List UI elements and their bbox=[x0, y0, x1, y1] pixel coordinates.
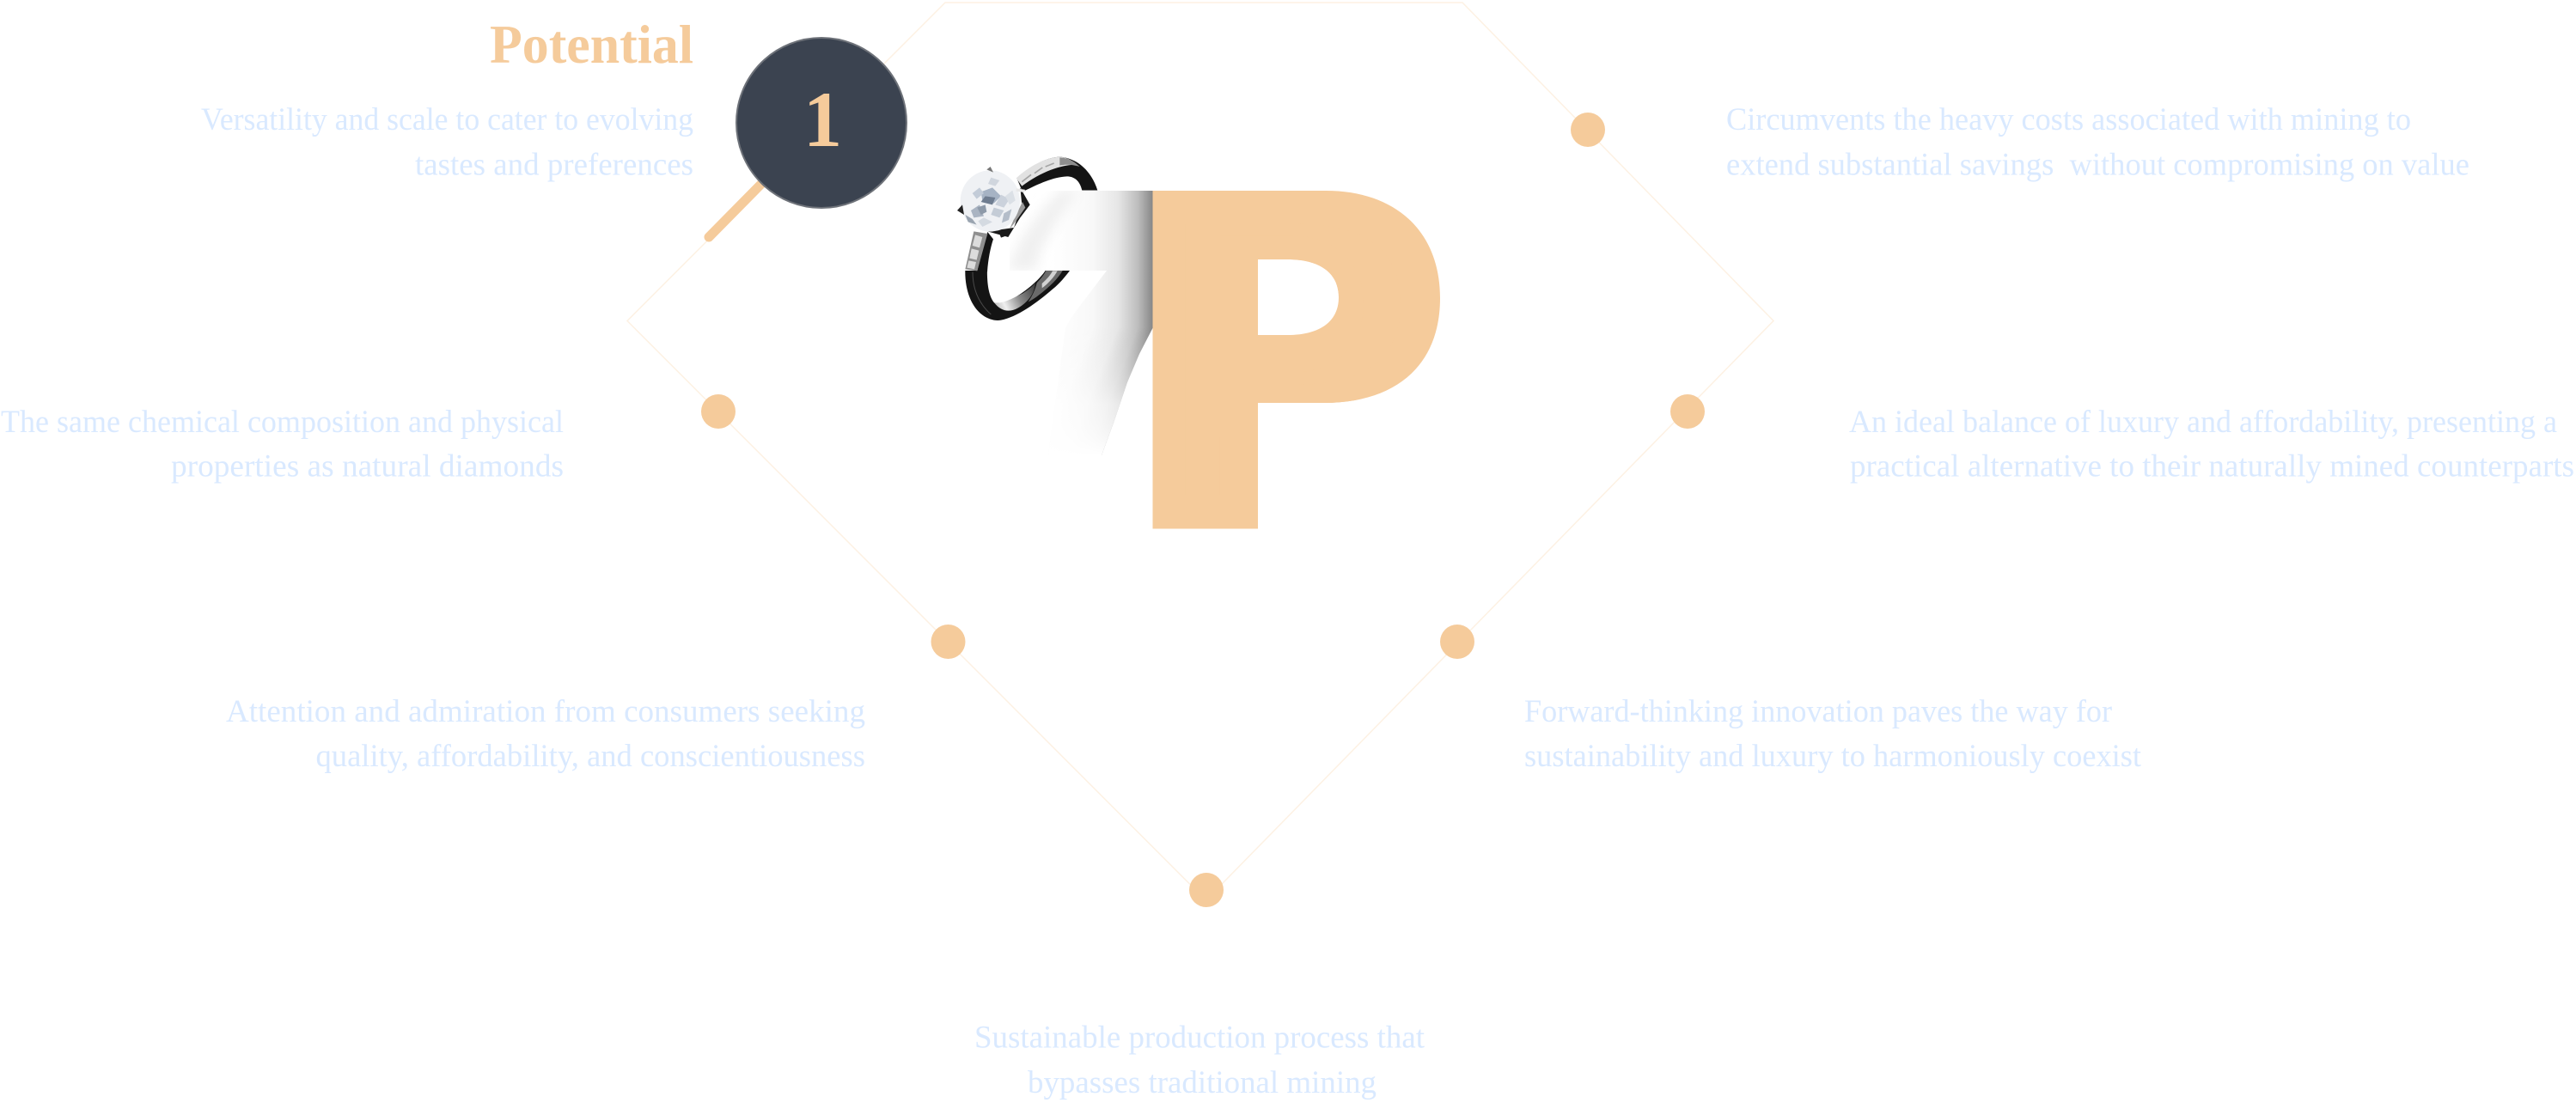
text block: versatility: tastes and preferences bbox=[415, 148, 693, 182]
page curl shadow bbox=[1007, 191, 1153, 455]
text block: sustainable production: bypasses traditional mining bbox=[1028, 1065, 1377, 1100]
text block: chemical composition: The same chemical composition and physical bbox=[1, 405, 564, 440]
icon: diamond ring bbox=[957, 157, 1097, 320]
text block: sustainable production: Sustainable production process that bbox=[974, 1021, 1425, 1055]
text block: versatility: Versatility and scale to cater to evolving bbox=[201, 102, 693, 137]
big letter P: P bbox=[1121, 113, 1443, 624]
number badge bbox=[736, 38, 906, 208]
text block: innovation: sustainability and luxury to harmoniously coexist bbox=[1524, 739, 2142, 774]
text block: innovation: Forward-thinking innovation paves the way for bbox=[1524, 694, 2112, 729]
diamond outline bbox=[627, 3, 1773, 900]
text block: innovation bbox=[1524, 694, 2142, 774]
number badge: 1 bbox=[803, 76, 842, 163]
text block: savings: extend substantial savings without compromising on value bbox=[1726, 148, 2469, 182]
text block: versatility bbox=[201, 102, 693, 182]
text block: sustainable production bbox=[974, 1021, 1425, 1100]
text block: consumer attention: Attention and admiration from consumers seeking bbox=[226, 694, 865, 729]
text block: chemical composition bbox=[1, 405, 564, 484]
text block: consumer attention bbox=[226, 694, 865, 774]
point markers bbox=[701, 113, 1705, 907]
text block: chemical composition: properties as natural diamonds bbox=[171, 448, 564, 484]
heading: Potential: Potential bbox=[490, 14, 693, 75]
text block: savings bbox=[1726, 102, 2469, 182]
text block: luxury balance: An ideal balance of luxury and affordability, presenting a bbox=[1849, 405, 2557, 440]
text block: consumer attention: quality, affordability, and conscientiousness bbox=[316, 739, 865, 774]
text block: luxury balance bbox=[1849, 405, 2574, 484]
text block: luxury balance: practical alternative to their naturally mined counterparts bbox=[1850, 448, 2574, 484]
connector stick bbox=[709, 176, 769, 237]
text block: savings: Circumvents the heavy costs associated with mining to bbox=[1726, 102, 2411, 137]
